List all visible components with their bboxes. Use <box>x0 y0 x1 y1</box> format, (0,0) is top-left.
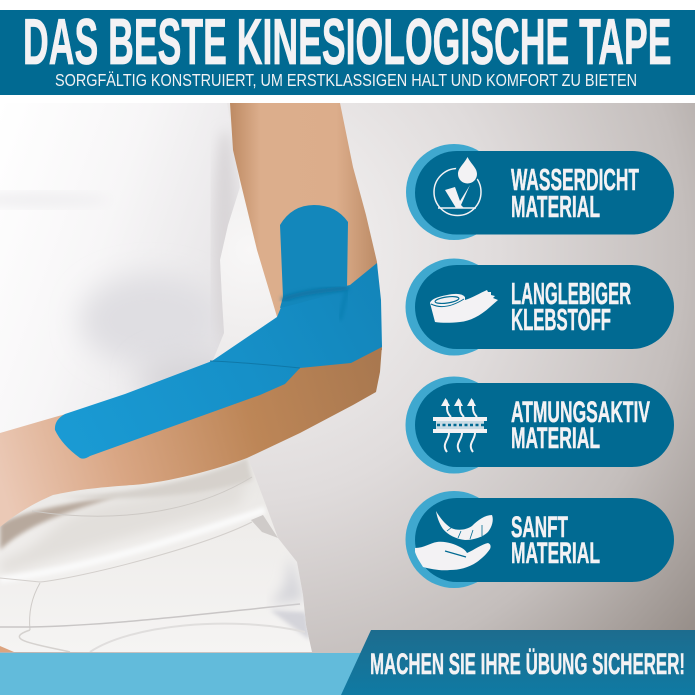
forearm and hand <box>0 345 382 527</box>
lower shirt and trousers <box>0 455 312 652</box>
feature badge: gentle <box>406 491 674 588</box>
badge circle <box>406 144 502 240</box>
studio backdrop <box>0 103 695 653</box>
feature badge: waterproof: MATERIAL <box>511 189 600 224</box>
tape shading <box>210 288 348 368</box>
badge circle <box>406 491 502 588</box>
feature badge: gentle: MATERIAL <box>511 537 600 570</box>
feature badge: breathable <box>406 376 674 474</box>
shirt soft shading <box>0 130 240 405</box>
tape: forearm strip <box>55 263 382 459</box>
bottom call-to-action banner <box>341 630 695 695</box>
icon: tape roll <box>430 290 498 323</box>
photo: arm with kinesiology tape <box>0 103 695 653</box>
header band <box>0 10 695 95</box>
badge pill <box>415 498 674 582</box>
feature badge: durable adhesive <box>406 258 674 356</box>
icon: breathable layers <box>433 398 487 452</box>
feature badge: durable adhesive: KLEBSTOFF <box>511 302 611 337</box>
white shirt upper <box>0 103 240 440</box>
icon: feather over hand <box>415 511 493 570</box>
feature badge: breathable: MATERIAL <box>511 422 600 455</box>
tape: vertical strip <box>280 205 348 308</box>
upper arm <box>230 103 382 372</box>
lower garment folds <box>0 458 310 652</box>
label: SANFT <box>511 511 568 544</box>
badge pill <box>415 265 674 349</box>
feature badge: waterproof <box>406 144 674 240</box>
bottom light blue band <box>0 653 370 695</box>
badge circle <box>406 258 502 356</box>
badge circle <box>406 376 502 474</box>
icon: water drop and check <box>434 157 481 216</box>
badge pill <box>415 151 674 234</box>
badge pill <box>415 383 674 467</box>
